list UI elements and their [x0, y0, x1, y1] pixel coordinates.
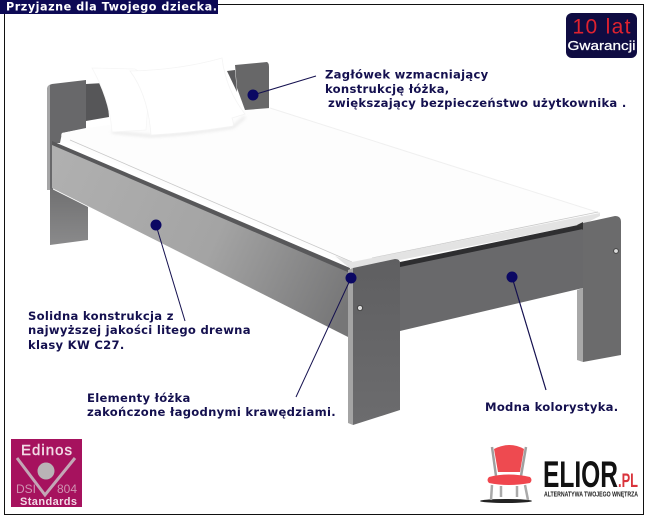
title banner: Przyjazne dla Twojego dziecka.: [6, 0, 217, 14]
Edinos logo: Standards: [20, 496, 77, 508]
mattress: [61, 108, 600, 266]
rear leg: [50, 188, 88, 245]
headboard panel: [86, 83, 109, 121]
left foot post: [348, 268, 353, 425]
callout: headboard: Zagłówek wzmacniający: [325, 68, 489, 82]
foot rail: [400, 226, 583, 331]
callout: solid construction: Solidna konstrukcja z: [28, 309, 174, 323]
callout: colour: Modna kolorystyka.: [485, 400, 618, 414]
Edinos logo: DSI: [16, 482, 36, 496]
callout: rounded edges: [87, 272, 356, 419]
warranty badge: [566, 13, 637, 58]
Edinos logo: [11, 439, 82, 508]
callout: headboard: zwiększający bezpieczeństwo użytkownika .: [328, 96, 627, 110]
right foot post: [577, 288, 583, 362]
bed illustration: [47, 58, 621, 425]
pillows: [92, 68, 150, 132]
Edinos logo: Edinos: [21, 442, 72, 459]
callout: rounded edges: zakończone łagodnymi krawędziami.: [87, 405, 336, 419]
Elior logo: .PL: [618, 471, 638, 492]
icon: red chair: [480, 445, 532, 503]
callout: rounded edges: Elementy łóżka: [87, 391, 191, 405]
callout: solid construction: klasy KW C27.: [28, 338, 124, 352]
screws: [357, 305, 363, 311]
Edinos logo: 804: [57, 482, 77, 496]
left headboard post: [47, 80, 86, 190]
pillow shadows: [112, 117, 245, 136]
callout: solid construction: najwyższej jakości litego drewna: [28, 323, 251, 337]
right headboard post: [235, 62, 269, 111]
side rail: [52, 142, 350, 338]
warranty badge: Gwarancji: [568, 38, 636, 53]
callout: solid construction: [28, 220, 251, 352]
callout: headboard: [248, 68, 627, 110]
warranty badge: 10 lat: [572, 16, 631, 38]
callout: headboard: konstrukcję łóżka,: [325, 82, 449, 96]
callout: colour: [485, 272, 618, 414]
